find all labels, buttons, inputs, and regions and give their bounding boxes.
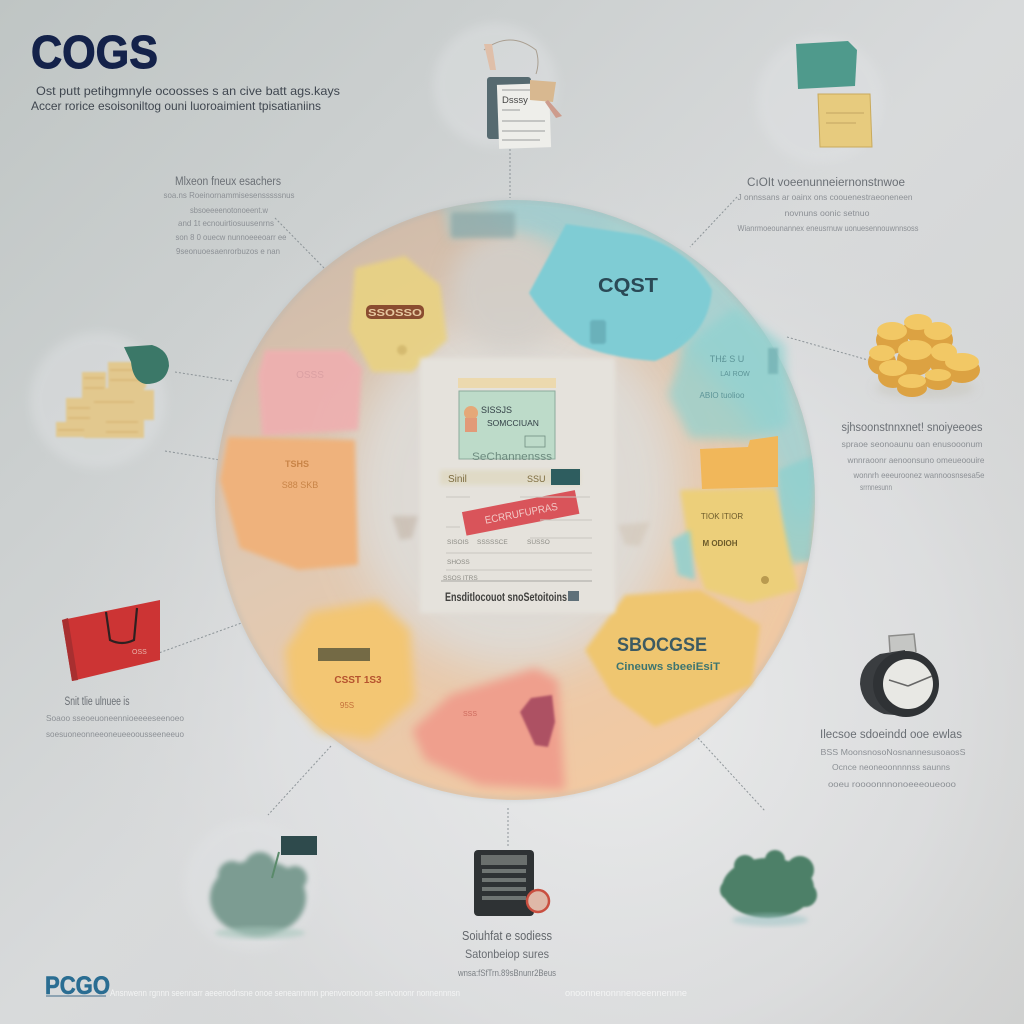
- segment: coral bag: SSS: [463, 711, 477, 718]
- icon: gold coins right: [868, 314, 980, 398]
- right-edge teal: [778, 455, 815, 570]
- segment: amber hexagon lower right: Cineuws sbeeiEsiT: [616, 661, 720, 673]
- icon: green and yellow folders: [796, 41, 872, 147]
- central document: SSOS ITRS: [443, 575, 478, 582]
- teal rim: [486, 200, 815, 527]
- central document: [420, 358, 615, 613]
- central document: SHOSS: [447, 559, 470, 566]
- lower right peach: [756, 557, 807, 678]
- callout: top right: Wianrmoeounannex eneusrnuw uonuesennouwnnsoss: [738, 223, 918, 233]
- callout: lower right: BSS MoonsnosoNosnannesusoaosS: [820, 747, 966, 757]
- callout: lower right: ooeu roooonnnonoeeeoueooo: [828, 779, 956, 789]
- document header strip: [458, 378, 556, 388]
- segment: yellow panel with folder: M ODIOH: [702, 539, 738, 548]
- segment: amber blob lower left: CSST 1S3: [334, 675, 382, 686]
- inner glow: [350, 310, 680, 670]
- rim stroke: [216, 201, 814, 799]
- callout: top left: son 8 0 ouecw nunnoeeeoarr ee: [176, 232, 287, 242]
- central document: SUSSO: [527, 539, 550, 546]
- callout: top left: 9seonuoesaenrorbuzos e nan: [176, 246, 280, 256]
- callout: top right: [738, 177, 918, 233]
- document lines: [441, 497, 592, 581]
- callout: bottom centre: Soiuhfat e sodiess: [462, 928, 552, 943]
- segment: yellow hexagon: SSOSSO: [368, 308, 422, 319]
- footer text: Ansnwenn rgnnn seennarr aeeenodnsne onoe seneannnnn pnenvonoonon senrvononr nonnennnsn: [110, 988, 460, 998]
- segment: orange panel: [220, 437, 358, 570]
- callout: lower left: Snit tlie ulnuee is: [64, 696, 130, 708]
- callout: right middle: sjhsoonstnnxnet! snoiyeeoes: [842, 422, 983, 434]
- callout: right middle: [842, 422, 985, 492]
- title: COGS: [31, 26, 158, 78]
- callout: top right: J onnssans ar oainx ons coouenestraeoneneen: [738, 192, 913, 202]
- logo: PCGO: [45, 972, 110, 1000]
- icon: green money pile left: [210, 836, 317, 939]
- callout: right middle: wnnraoonr aenoonsuno omeueoouire: [847, 455, 985, 465]
- icon: green money pile right: [720, 850, 817, 926]
- callout: top right: CıOIt voeenunneiernonstnwoe: [747, 177, 905, 189]
- segment: amber blob lower left: 95S: [340, 701, 354, 710]
- callout: right middle: wonnrh eeeuroonez wannoosnsesa5e: [853, 470, 985, 480]
- icon: red briefcase: [62, 600, 160, 681]
- callout: lower right: Ocnce neoneoonnnnss saunns: [832, 762, 950, 772]
- callout: top right: novnuns oonic setnuo: [784, 208, 870, 218]
- icon: green tag: [124, 345, 169, 384]
- central document: Sinil: [448, 474, 467, 485]
- segment: teal panel: ABIO tuolioo: [700, 391, 745, 400]
- red stamp: ECRRUFUPRAS: [484, 501, 559, 527]
- callout: bottom centre: wnsa:fSfTrn.89sBnunr2Beus: [457, 968, 556, 978]
- small folder on rim: [451, 212, 515, 238]
- footer text: onoonnenonnnenoeennennne: [565, 988, 687, 998]
- segment: teal panel: TH£ S U: [710, 354, 744, 364]
- icon: red briefcase: OSS: [132, 649, 147, 656]
- icon: gold coin stacks left: [56, 362, 154, 438]
- segment: teal cost tag: [529, 224, 712, 361]
- intro text: [31, 84, 340, 113]
- callout: top left: soa.ns Roeinornammisesensssssnus: [164, 190, 294, 200]
- segment: orange panel: TSHS: [285, 459, 309, 469]
- segment: yellow hexagon: [350, 256, 447, 372]
- central document: SISOIS: [447, 539, 469, 546]
- segment: teal cost tag: CQST: [598, 275, 658, 297]
- bill strip: [440, 470, 580, 485]
- callout: lower left: [46, 696, 184, 739]
- segment: pink tag: [258, 350, 362, 436]
- segment: yellow panel with folder: [672, 436, 798, 603]
- central document: SISSJS: [481, 405, 512, 415]
- callout: lower left: soesuoneonneeoneueeoousseeneeuo: [46, 729, 184, 739]
- green card: [459, 391, 555, 459]
- segment: coral bag: [412, 668, 565, 790]
- icon: alarm clock: [860, 634, 939, 717]
- central document: SSSSSCE: [477, 539, 508, 546]
- segment: pink tag: OSSS: [296, 370, 324, 381]
- callout: top left: and 1t ecnouirtiosuusenrns: [178, 218, 274, 228]
- intro text: Accer rorice esoisoniltog ouni luoroaimient tpisatianiins: [31, 99, 321, 113]
- top rim band: [441, 201, 531, 241]
- segment: amber hexagon lower right: SBOCGSE: [617, 635, 707, 656]
- red stamp: [462, 490, 579, 536]
- faint shape left of document: [392, 516, 418, 540]
- callout: lower right: [820, 729, 966, 789]
- icon halos: [30, 23, 884, 951]
- callout: lower left: Soaoo sseoeuoneennioeeeeseenoeo: [46, 713, 184, 723]
- central document: Ensditlocouot snoSetoitoins: [445, 592, 567, 604]
- central cost wheel: [215, 180, 830, 800]
- segment: teal panel: LAI ROW: [720, 371, 750, 378]
- callout: right middle: srrnnesunn: [860, 482, 892, 492]
- callout: top left: Mlxeon fneux esachers: [175, 176, 281, 188]
- callout: top left: sbsoeeeenotonoeent.w: [190, 205, 269, 215]
- segment: teal panel: [668, 307, 788, 440]
- central document: SeChannensss: [472, 451, 553, 463]
- central document: SOMCCIUAN: [487, 418, 539, 428]
- callout: top left: [164, 176, 294, 256]
- intro text: Ost putt petihgmnyle ocoosses s an cive batt ags.kays: [36, 84, 340, 98]
- callout: bottom centre: [457, 928, 556, 978]
- connector lines: [156, 145, 868, 848]
- icon: calculator: [474, 850, 549, 916]
- segment: amber hexagon lower right: [585, 590, 760, 727]
- segment: amber blob lower left: [285, 600, 415, 740]
- segment: yellow panel with folder: TIOK ITIOR: [701, 512, 743, 521]
- folder icon: [700, 436, 778, 489]
- segment: orange panel: S88 SKB: [282, 480, 318, 490]
- icon: clipboard with tag: Dsssy: [502, 95, 528, 106]
- footer text: [110, 988, 687, 998]
- icon: clipboard with tag: [484, 40, 562, 149]
- upper grey wash: [446, 230, 555, 339]
- callout: right middle: spraoe seonoaunu oan enusooonum: [842, 439, 982, 449]
- central document: SSU: [527, 474, 546, 484]
- callout: lower right: Ilecsoe sdoeindd ooe ewlas: [820, 729, 962, 741]
- callout: bottom centre: Satonbeiop sures: [465, 947, 549, 961]
